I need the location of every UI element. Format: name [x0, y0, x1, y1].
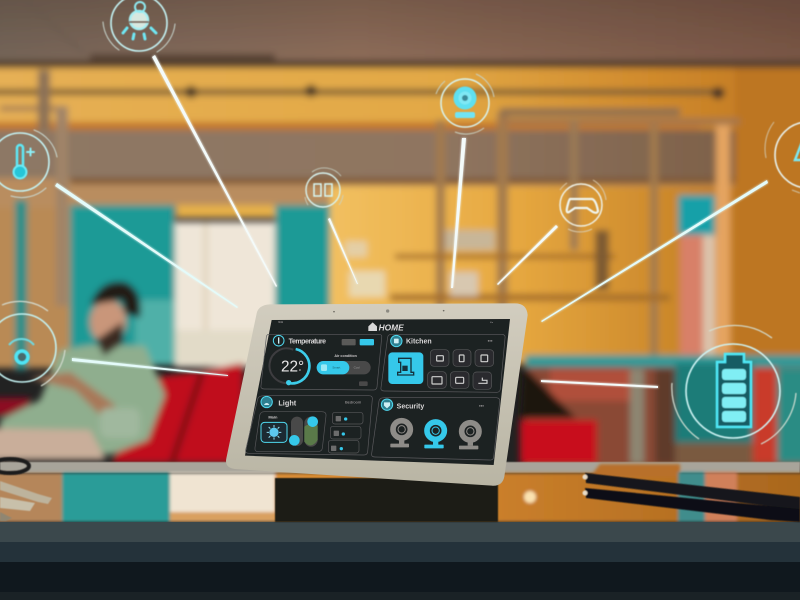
keys — [0, 459, 52, 521]
air condition label: Air condition — [334, 354, 357, 358]
panel: kitchen — [381, 334, 505, 392]
icon: light bulb — [103, 0, 175, 52]
security label: Security — [397, 403, 424, 410]
grey-brown soffit — [0, 130, 740, 178]
table front edge — [0, 522, 800, 542]
hub base — [275, 478, 498, 522]
table back edge — [0, 462, 800, 473]
temperature reading: 22° — [281, 358, 304, 375]
heading: HOME: HOME — [379, 322, 404, 332]
back wall — [330, 186, 740, 364]
temperature label: Temperature — [289, 338, 326, 345]
security icon — [381, 399, 393, 410]
panel: temperature — [261, 334, 382, 390]
mode buttons — [342, 339, 356, 345]
panel: temperature: Cool — [354, 365, 360, 369]
icon: webcam — [436, 74, 494, 134]
icon: thermometer — [0, 130, 57, 198]
kitchen icon — [391, 335, 402, 347]
pen on table — [582, 473, 800, 522]
icon: smart plug — [305, 168, 343, 207]
person — [0, 345, 165, 455]
kitchen label: Kitchen — [406, 339, 432, 346]
icon: top right device — [765, 122, 800, 193]
panel: kitchen: ••• — [488, 339, 493, 344]
pictures on wall — [345, 241, 367, 257]
heading: HOME — [368, 322, 404, 332]
icon: battery — [672, 325, 796, 444]
table reflection — [0, 464, 800, 522]
panel: security — [372, 398, 500, 460]
temperature dial — [269, 348, 293, 383]
table top — [0, 462, 800, 600]
tablet bezel — [226, 303, 528, 486]
ceiling ledge — [90, 54, 275, 64]
teal curtains — [70, 205, 175, 365]
connector lines from devices to hub — [55, 55, 768, 388]
main light group — [255, 412, 326, 452]
person's dark bag behind tablet — [520, 366, 576, 418]
coffee machine tile — [388, 352, 423, 384]
right shelving frame — [436, 120, 445, 360]
background: blurred living room — [0, 0, 800, 467]
panel: security: ••• — [479, 404, 484, 409]
tablet: smart home hub: •• ▪ — [490, 322, 493, 324]
light icon — [261, 396, 272, 408]
room label: Bedroom — [345, 400, 362, 405]
panel: light — [246, 396, 372, 455]
right room lower area — [525, 355, 800, 367]
brightness sliders — [291, 417, 303, 446]
light label: Light — [278, 399, 297, 408]
panel: temperature: c — [299, 367, 301, 372]
icon: game controller — [560, 180, 606, 232]
red sofa — [112, 363, 243, 463]
upper wall stripes — [0, 68, 800, 130]
icon: wifi — [0, 301, 65, 386]
window — [175, 222, 275, 367]
panel: temperature: Smart — [332, 365, 340, 369]
status bar: 9:41 — [278, 322, 284, 324]
tablet screen — [245, 319, 510, 465]
tablet: smart home hub — [226, 303, 528, 486]
right books and teal panel — [678, 195, 715, 235]
temperature icon — [273, 335, 284, 346]
camera left — [390, 421, 410, 447]
camera centre — [424, 422, 444, 448]
camera right — [459, 423, 479, 449]
air condition switch — [317, 361, 371, 374]
sun tile — [261, 422, 287, 442]
light rows — [328, 412, 363, 453]
ceiling — [0, 0, 800, 65]
appliance tiles — [428, 350, 494, 389]
panel: light: Main — [268, 414, 278, 419]
left shelving — [0, 208, 70, 368]
